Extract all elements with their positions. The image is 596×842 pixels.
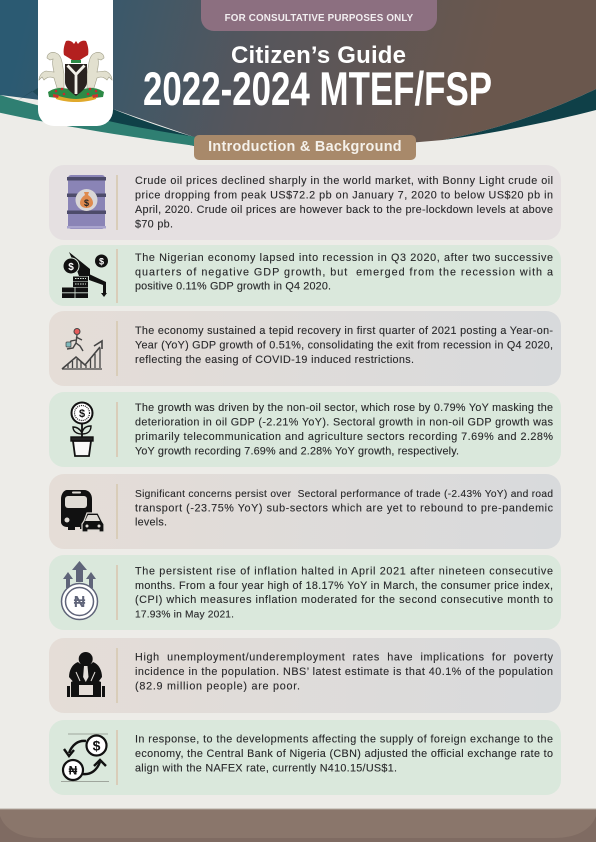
text: exchange rate: In response, to the developments affecting the supply of foreign exchange to the	[135, 733, 553, 745]
text: inflation: The persistent rise of inflation halted in April 2021 after nineteen consecutive	[135, 566, 553, 578]
text: sectoral concerns: Significant concerns persist over Sectoral performance of trade (-2.43% YoY) and road	[135, 488, 553, 500]
panel: sectoral concerns	[49, 474, 561, 548]
text: unemployment	[135, 651, 554, 692]
icon: money plant	[70, 402, 94, 457]
title	[143, 42, 492, 115]
text: recession: The Nigerian economy lapsed into recession in Q3 2020, after two successive	[135, 252, 553, 264]
text: inflation	[135, 566, 553, 621]
text: crude oil: $70 pb.	[135, 218, 173, 230]
icon: naira coin with rising arrows: ₦	[74, 594, 86, 611]
text: tepid recovery: reflecting the easing of COVID-19 induced restrictions.	[135, 354, 414, 366]
section heading	[194, 135, 416, 160]
panel: tepid recovery	[49, 311, 561, 386]
text: non-oil growth: deterioration in oil GDP (-2.21% YoY). Sectoral growth in non-oil GDP growth was	[135, 417, 554, 429]
text: crude oil	[135, 175, 553, 230]
text: unemployment: incidence in the population. NBS’ latest estimate is that 40.1% of the population	[135, 666, 553, 678]
icon: falling economy	[62, 252, 108, 298]
icon: currency exchange: ₦	[69, 763, 78, 777]
icon: naira coin with rising arrows	[60, 561, 98, 620]
banner: consultative notice: FOR CONSULTATIVE PURPOSES ONLY	[225, 13, 413, 24]
text: sectoral concerns: levels.	[135, 516, 167, 528]
text: non-oil growth: primarily telecommunication and agriculture sectors recording 7.69% and 2.28%	[135, 431, 553, 443]
icon: falling economy: $	[99, 256, 104, 266]
icon: money plant: $	[79, 408, 85, 420]
text: exchange rate: align with the NAFEX rate, currently N410.15/US$1.	[135, 762, 397, 774]
icon: bus and car	[61, 490, 104, 532]
panel: unemployment	[49, 638, 561, 712]
icon: runner on rising chart	[62, 328, 103, 370]
header banner	[0, 0, 596, 146]
panel: exchange rate	[49, 720, 561, 794]
text: inflation: 17.93% in May 2021.	[135, 610, 234, 621]
panel: inflation	[49, 555, 561, 630]
text: unemployment: High unemployment/underemployment rates have implications for poverty	[135, 651, 554, 663]
icon: currency exchange	[61, 734, 109, 782]
text: sectoral concerns: transport (-23.75% YoY) sub-sectors which are yet to rebound to pre-pandemic	[135, 502, 554, 514]
text: tepid recovery: The economy sustained a tepid recovery in first quarter of 2021 posting a Year-on-	[135, 325, 553, 337]
text: non-oil growth: The growth was driven by the non-oil sector, which rose by 0.79% YoY masking the	[135, 402, 553, 414]
text: unemployment: (82.9 million people) are poor.	[135, 680, 300, 692]
banner: consultative notice	[201, 0, 437, 31]
text: crude oil: Crude oil prices declined sharply in the world market, with Bonny Light crude oil	[135, 175, 553, 187]
coat of arms card	[38, 0, 113, 126]
text: exchange rate: economy, the Central Bank of Nigeria (CBN) adjusted the official exchange rate to	[135, 748, 553, 760]
text: non-oil growth: YoY growth recording 7.69% and 2.28% YoY growth, respectively.	[135, 445, 459, 457]
panel: crude oil prices	[49, 165, 561, 240]
icon: currency exchange: $	[93, 737, 101, 753]
text: tepid recovery: Year (YoY) GDP growth of 0.51%, consolidating the exit from recession in Q4 2020,	[135, 340, 553, 352]
icon: dejected person	[67, 652, 105, 697]
footer band	[0, 808, 596, 842]
text: inflation: (CPI) which measures inflation moderated for the second consecutive month to	[135, 594, 553, 606]
text: crude oil: price dropping from peak US$72.2 pb on January 7, 2020 to below US$20 pb in	[135, 190, 553, 202]
text: crude oil: April, 2020. Crude oil prices are however back to the pre-lockdown levels at above	[135, 204, 553, 216]
icon: Nigerian coat of arms	[38, 40, 112, 102]
text: non-oil growth	[135, 402, 554, 457]
text: recession	[135, 252, 554, 293]
text: tepid recovery	[135, 325, 553, 366]
text: recession: quarters of negative GDP growth, but emerged from the recession with a	[135, 266, 553, 278]
panel: non-oil growth	[49, 392, 561, 467]
icon: falling economy: $	[68, 262, 74, 273]
icon: oil barrel	[67, 175, 106, 229]
text: inflation: months. From a four year high of 18.17% YoY in March, the consumer price index,	[135, 580, 553, 592]
text: sectoral concerns	[135, 488, 554, 528]
section heading: Introduction & Background	[208, 139, 402, 155]
text: exchange rate	[135, 733, 553, 774]
text: recession: positive 0.11% GDP growth in Q4 2020.	[135, 281, 331, 293]
panel: recession	[49, 245, 561, 306]
icon: oil barrel: $	[84, 198, 89, 208]
title: Citizen’s Guide	[231, 42, 406, 69]
